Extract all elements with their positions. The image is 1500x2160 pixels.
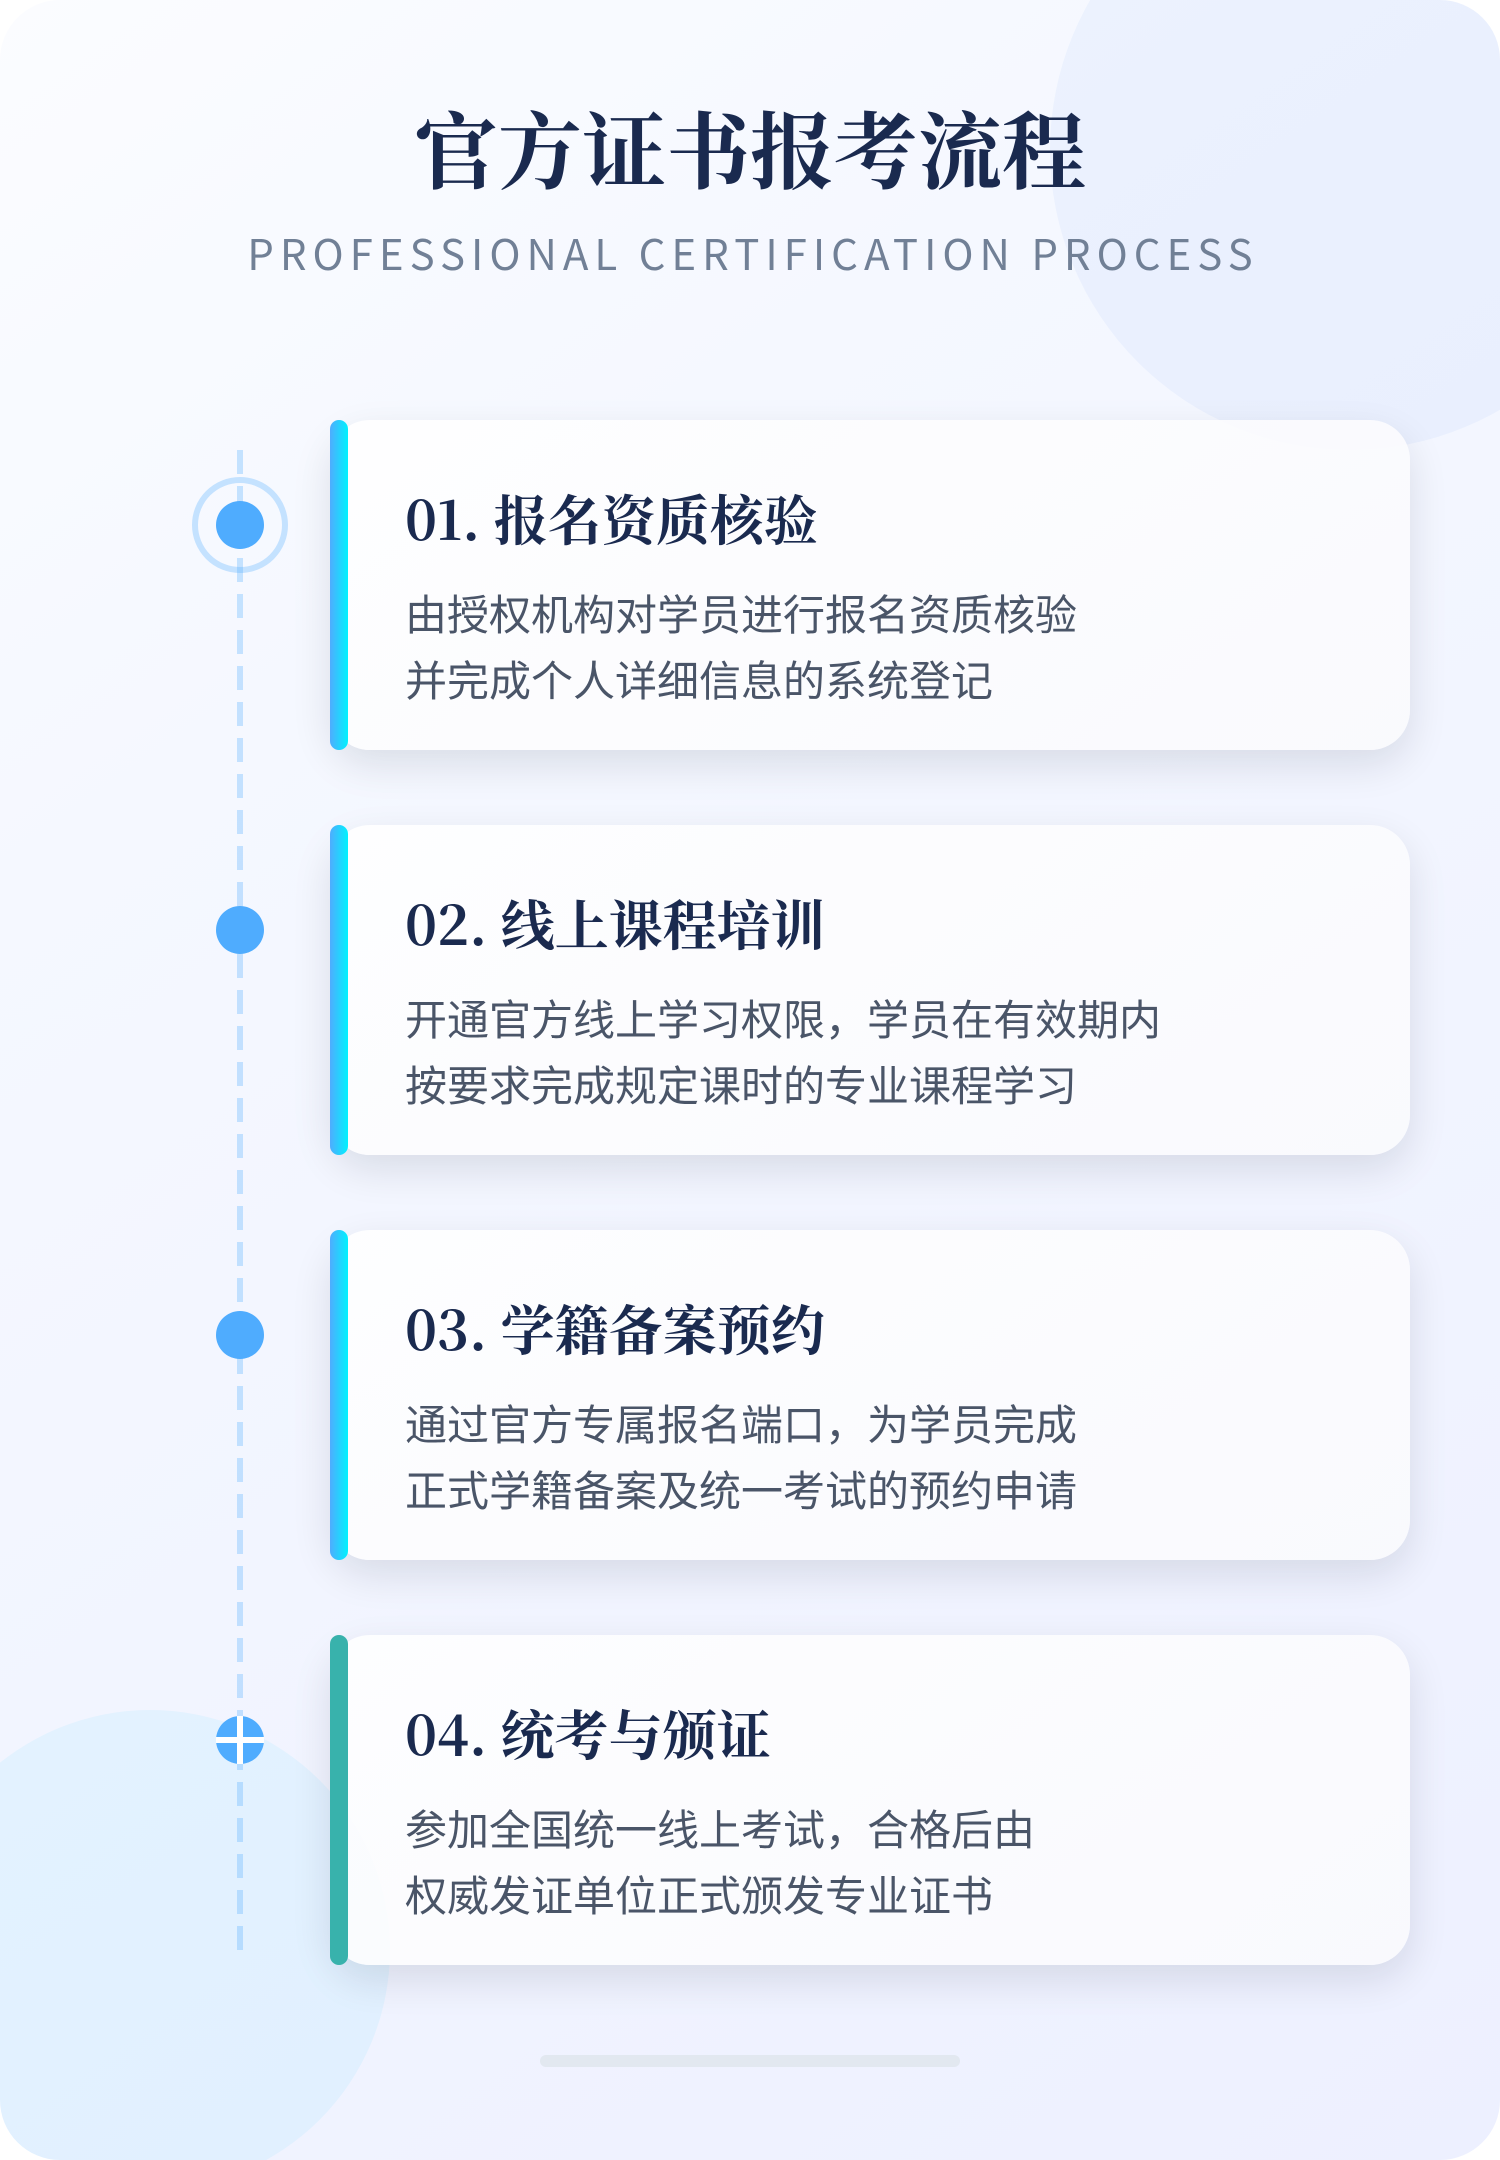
card 1 — [330, 420, 1410, 750]
step 4 marker — [216, 1716, 264, 1764]
card 1 description: 由授权机构对学员进行报名资质核验 — [405, 582, 1077, 643]
timeline dashed line — [237, 450, 243, 1950]
step 2 marker — [216, 906, 264, 954]
card 1 heading: 01. 报名资质核验 — [405, 479, 818, 556]
subtitle: PROFESSIONAL CERTIFICATION PROCESS — [247, 222, 1259, 283]
step 3 marker — [216, 1311, 264, 1359]
card 3 description — [405, 1392, 1077, 1519]
card 3 — [330, 1230, 1410, 1560]
card 4 description: 参加全国统一线上考试，合格后由 — [405, 1797, 1035, 1858]
card 1 description: 并完成个人详细信息的系统登记 — [405, 648, 993, 709]
timeline — [192, 450, 288, 1950]
card 1 description — [405, 582, 1077, 709]
decorative circle top right — [1050, 0, 1500, 450]
card 3 description: 正式学籍备案及统一考试的预约申请 — [405, 1458, 1077, 1519]
card 4 heading: 04. 统考与颁证 — [405, 1694, 771, 1771]
card 2 — [330, 825, 1410, 1155]
card 1 accent bar — [330, 420, 348, 750]
card 2 description: 按要求完成规定课时的专业课程学习 — [405, 1053, 1077, 1114]
card 2 description: 开通官方线上学习权限，学员在有效期内 — [405, 987, 1161, 1048]
title: 官方证书报考流程 — [414, 86, 1086, 207]
card 3 accent bar — [330, 1230, 348, 1560]
card 2 heading: 02. 线上课程培训 — [405, 884, 825, 961]
card 3 description: 通过官方专属报名端口，为学员完成 — [405, 1392, 1077, 1453]
card 2 description — [405, 987, 1161, 1114]
card 4 description — [405, 1797, 1035, 1924]
card 4 description: 权威发证单位正式颁发专业证书 — [405, 1863, 993, 1924]
card 4 — [330, 1635, 1410, 1965]
decorative circle bottom left — [0, 1710, 390, 2160]
card 4 accent bar — [330, 1635, 348, 1965]
card 2 accent bar — [330, 825, 348, 1155]
footer bar — [540, 2055, 960, 2067]
step 1 marker — [195, 480, 285, 570]
card 3 heading: 03. 学籍备案预约 — [405, 1289, 825, 1366]
